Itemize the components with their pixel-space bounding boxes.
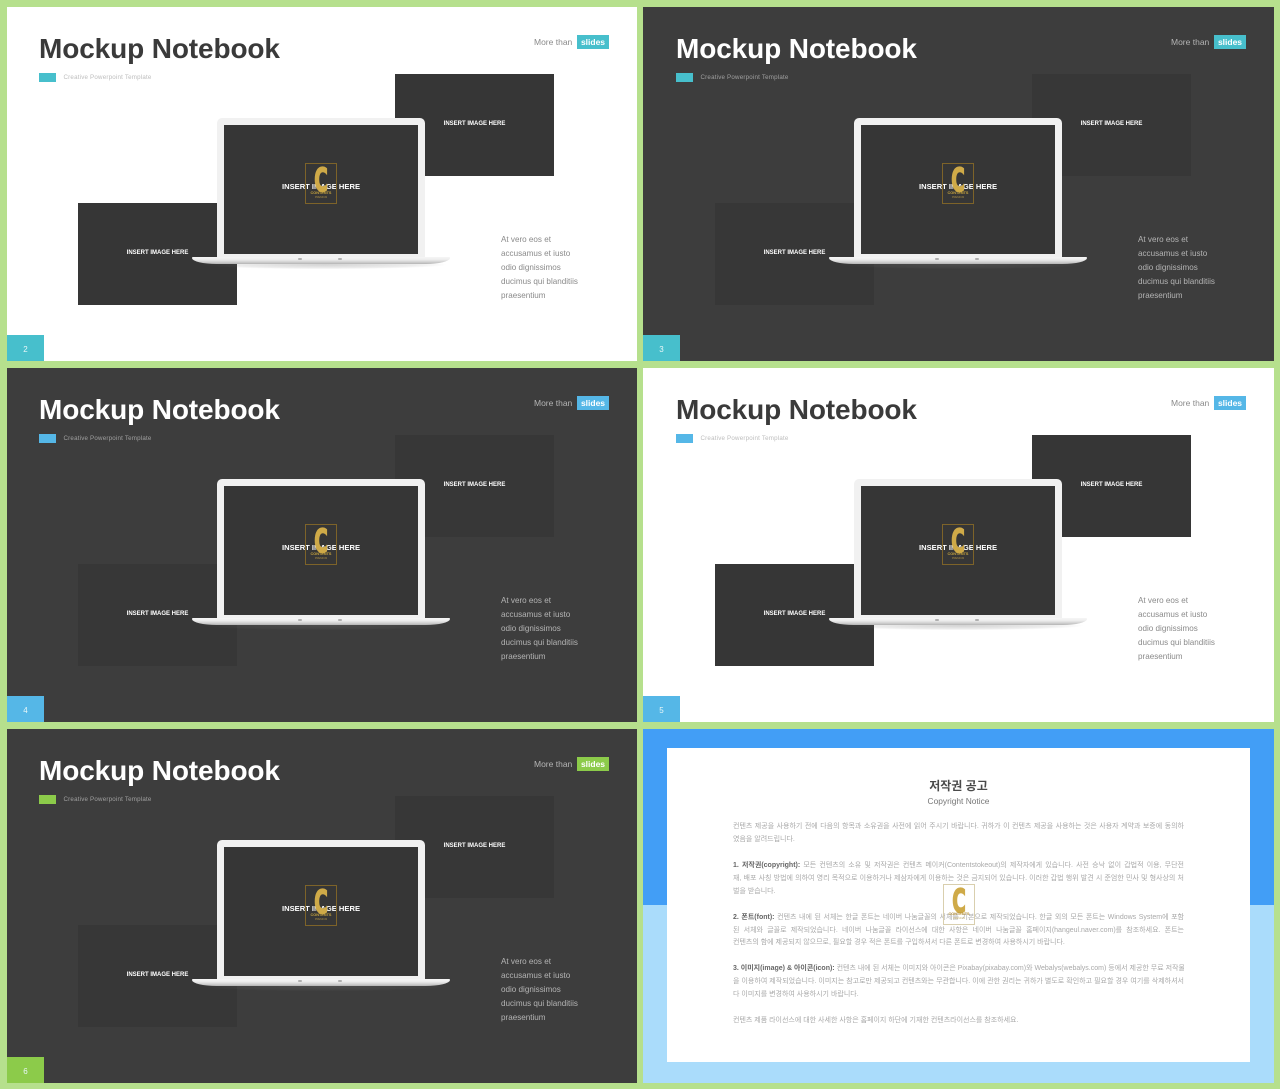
slides badge: slides — [581, 398, 605, 408]
image placeholder bottom left: INSERT IMAGE HERE — [127, 611, 188, 617]
page number — [643, 335, 680, 361]
section 1: copyright: 재, 배포 사칭 방법에 의하여 영리 목적으로 이용하거나 제삼자에게 이용하는 것은 금지되어 있습니다. 이러한 갑법 행위 발견 시 준엄한 민사 및 형사상의 처 — [733, 875, 1184, 882]
more than label: More than — [534, 398, 572, 408]
slides badge — [577, 757, 609, 771]
page number — [7, 335, 44, 361]
section 3: image and icon: 다 이미지를 변경하여 사용하시기 바랍니다. — [733, 991, 859, 998]
notebook mockup — [829, 479, 1087, 630]
gold logo watermark — [305, 163, 337, 204]
more than label: More than — [1171, 37, 1209, 47]
notebook mockup — [192, 118, 450, 268]
page number: 3 — [659, 345, 664, 354]
notebook mockup: INSERT IMAGE HERE — [919, 182, 997, 191]
body text: odio dignissimos — [501, 624, 561, 633]
gold logo watermark on card — [943, 884, 975, 925]
copyright notice slide — [643, 729, 1274, 1083]
body text: praesentium — [501, 1013, 546, 1022]
subtitle: Creative Powerpoint Template — [64, 74, 152, 81]
image placeholder top right — [395, 74, 554, 176]
gold logo watermark: CONTENTS — [311, 191, 331, 195]
body text: accusamus et iusto — [501, 971, 570, 980]
gold logo watermark: PREMIUM — [315, 918, 327, 921]
slides badge: slides — [1218, 37, 1242, 47]
accent swatch — [39, 795, 56, 804]
accent swatch — [676, 434, 693, 443]
body text — [501, 957, 578, 1022]
gold logo watermark: C — [951, 160, 965, 199]
body text: accusamus et iusto — [501, 610, 570, 619]
slide 3: dark, teal accent — [643, 7, 1274, 361]
subtitle: Creative Powerpoint Template — [700, 435, 789, 442]
body text: ducimus qui blanditiis — [501, 638, 578, 647]
image placeholder bottom left: INSERT IMAGE HERE — [764, 250, 825, 256]
section 3: image and icon: 3. 이미지(image) & 아이콘(icon): 컨텐츠 내에 된 서체는 이미지와 아이콘은 Pixabay(pixabay.com)와 Webalys(webalys.com) 등에서 제공한 무료 저작물 — [733, 965, 1184, 972]
title: Mockup Notebook — [39, 33, 280, 64]
image placeholder bottom left: INSERT IMAGE HERE — [764, 611, 825, 617]
gold logo watermark: C — [314, 521, 328, 560]
slides badge: slides — [1218, 398, 1242, 408]
gold logo watermark on card: PREMIUM — [953, 917, 965, 920]
body text: At vero eos et — [501, 235, 551, 244]
body text: ducimus qui blanditiis — [1138, 277, 1215, 286]
section 2: font — [733, 913, 1184, 946]
image placeholder top right: INSERT IMAGE HERE — [444, 121, 505, 127]
image placeholder bottom left — [715, 203, 874, 305]
notebook mockup — [192, 479, 450, 628]
gold logo watermark — [942, 524, 974, 565]
accent swatch — [676, 73, 693, 82]
slides badge: slides — [581, 37, 605, 47]
image placeholder top right: INSERT IMAGE HERE — [1081, 121, 1142, 127]
body text: At vero eos et — [1138, 596, 1188, 605]
body text: At vero eos et — [501, 596, 551, 605]
slides badge — [1214, 35, 1246, 49]
gold logo watermark: CONTENTS — [948, 552, 968, 556]
section 1: copyright: 1. 저작권(copyright): 모든 컨텐츠의 소유 및 저작권은 컨텐츠 메이커(Contentstokeout)의 제작자에게 있습니다. 사전 승낙 없이 갑법적 이용, 무단전 — [733, 862, 1184, 869]
section 2: font: 된 서체와 글꼴로 제작되었습니다. 네이버 나눔글꼴 라이선스에 대한 사항은 네이버 나눔글꼴 홈페이지(hangeul.naver.com)를 참조하세요. 폰트는 — [733, 927, 1184, 934]
image placeholder top right — [395, 796, 554, 898]
body text: odio dignissimos — [1138, 263, 1198, 272]
more than label: More than — [534, 759, 572, 769]
image placeholder bottom left — [78, 925, 237, 1027]
gold logo watermark: PREMIUM — [315, 196, 327, 199]
accent swatch — [39, 73, 56, 82]
notebook mockup — [192, 840, 450, 990]
image placeholder top right — [1032, 435, 1191, 537]
body text: accusamus et iusto — [501, 249, 570, 258]
slide 3 content — [643, 33, 1246, 361]
intro paragraph: 컨텐츠 제공을 사용하기 전에 다음의 항목과 소유권을 사전에 읽어 주시기 바랍니다. 귀하가 이 컨텐츠 제공을 사용하는 것은 사용자 계약과 보증에 동의하 — [733, 823, 1184, 830]
gold logo watermark — [305, 885, 337, 926]
body text — [501, 235, 578, 300]
page number — [7, 1057, 44, 1083]
section 2: font: 2. 폰트(font): 컨텐츠 내에 된 서체는 한글 폰트는 네이버 나눔글꼴의 서체를 기본으로 제작되었습니다. 한글 외의 모든 폰트는 Windows System에 포함 — [733, 914, 1184, 921]
notebook mockup — [829, 118, 1087, 268]
gold logo watermark: CONTENTS — [948, 191, 968, 195]
slides badge: slides — [581, 759, 605, 769]
body text: odio dignissimos — [501, 985, 561, 994]
section 2: font: 컨텐츠의 함에 제공되지 않으므로, 필요할 경우 적은 폰트를 구입하셔서 다른 폰트로 변경하여 사용하시기 바랍니다. — [733, 939, 1065, 946]
subtitle: Creative Powerpoint Template — [700, 74, 789, 81]
title: Mockup Notebook — [39, 755, 280, 786]
page number — [7, 696, 44, 722]
more than label: More than — [534, 37, 572, 47]
slide 4: dark, blue accent — [7, 368, 637, 722]
gold logo watermark on card: CONTENTS — [949, 912, 969, 916]
page number: 4 — [23, 706, 28, 715]
title: Mockup Notebook — [676, 33, 917, 64]
slides badge — [577, 35, 609, 49]
page number: 6 — [23, 1067, 28, 1076]
body text: accusamus et iusto — [1138, 610, 1207, 619]
section 3: image and icon — [733, 964, 1184, 998]
title: Mockup Notebook — [676, 394, 917, 425]
gold logo watermark: PREMIUM — [952, 557, 964, 560]
gold logo watermark: CONTENTS — [311, 552, 331, 556]
body text: ducimus qui blanditiis — [501, 999, 578, 1008]
page number: 5 — [659, 706, 664, 715]
closing line: 컨텐츠 제품 라이선스에 대한 사세한 사항은 홈페이지 하단에 기재한 컨텐츠라이선스를 참조하세요. — [733, 1017, 1018, 1024]
notice subheading: Copyright Notice — [928, 796, 989, 806]
image placeholder bottom left: INSERT IMAGE HERE — [127, 972, 188, 978]
slide 2: white, teal accent — [7, 7, 637, 361]
body text — [1138, 596, 1215, 661]
gold logo watermark — [305, 524, 337, 565]
slide 5 content — [643, 394, 1246, 722]
image placeholder top right: INSERT IMAGE HERE — [1081, 482, 1142, 488]
image placeholder top right — [395, 435, 554, 537]
notebook mockup: INSERT IMAGE HERE — [282, 543, 360, 552]
title: Mockup Notebook — [39, 394, 280, 425]
gold logo watermark: C — [951, 521, 965, 560]
intro paragraph — [733, 822, 1184, 843]
image placeholder bottom left — [78, 203, 237, 305]
body text: praesentium — [1138, 652, 1183, 661]
section 1: copyright — [733, 861, 1184, 895]
intro paragraph: 였음을 알려드립니다. — [733, 836, 795, 843]
page number: 2 — [23, 345, 28, 354]
slides badge — [1214, 396, 1246, 410]
image placeholder top right — [1032, 74, 1191, 176]
body text: accusamus et iusto — [1138, 249, 1207, 258]
image placeholder top right: INSERT IMAGE HERE — [444, 843, 505, 849]
section 1: copyright: 벌을 받습니다. — [733, 888, 776, 895]
white notice card — [667, 748, 1250, 1062]
body text — [1138, 235, 1215, 300]
image placeholder bottom left — [715, 564, 874, 666]
image placeholder bottom left — [78, 564, 237, 666]
subtitle: Creative Powerpoint Template — [64, 435, 152, 442]
gold logo watermark: PREMIUM — [952, 196, 964, 199]
body text: ducimus qui blanditiis — [1138, 638, 1215, 647]
body text: At vero eos et — [501, 957, 551, 966]
notebook mockup: INSERT IMAGE HERE — [282, 904, 360, 913]
body text: ducimus qui blanditiis — [501, 277, 578, 286]
gold logo watermark — [942, 163, 974, 204]
image placeholder bottom left: INSERT IMAGE HERE — [127, 250, 188, 256]
slide 6: dark, green accent — [7, 729, 637, 1083]
notebook mockup: INSERT IMAGE HERE — [919, 543, 997, 552]
notebook mockup: INSERT IMAGE HERE — [282, 182, 360, 191]
slide 5: white, blue accent — [643, 368, 1274, 722]
body text: praesentium — [501, 291, 546, 300]
subtitle: Creative Powerpoint Template — [64, 796, 152, 803]
more than label: More than — [1171, 398, 1209, 408]
page number — [643, 696, 680, 722]
body text: odio dignissimos — [501, 263, 561, 272]
notice heading: 저작권 공고 — [929, 779, 988, 793]
slides badge — [577, 396, 609, 410]
gold logo watermark: C — [314, 882, 328, 921]
body text: At vero eos et — [1138, 235, 1188, 244]
body text — [501, 596, 578, 661]
gold logo watermark on card: C — [952, 881, 966, 920]
body text: odio dignissimos — [1138, 624, 1198, 633]
body text: praesentium — [1138, 291, 1183, 300]
gold logo watermark: CONTENTS — [311, 913, 331, 917]
body text: praesentium — [501, 652, 546, 661]
image placeholder top right: INSERT IMAGE HERE — [444, 482, 505, 488]
gold logo watermark: C — [314, 160, 328, 199]
accent swatch — [39, 434, 56, 443]
section 3: image and icon: 을 이용하여 제작되었습니다. 이미지는 참고로만 제공되고 컨텐츠와는 무관합니다. 이에 관한 권리는 귀하가 별도로 확인하고 필요할 경우 여기를 삭제하셔서 — [733, 978, 1184, 985]
gold logo watermark: PREMIUM — [315, 557, 327, 560]
